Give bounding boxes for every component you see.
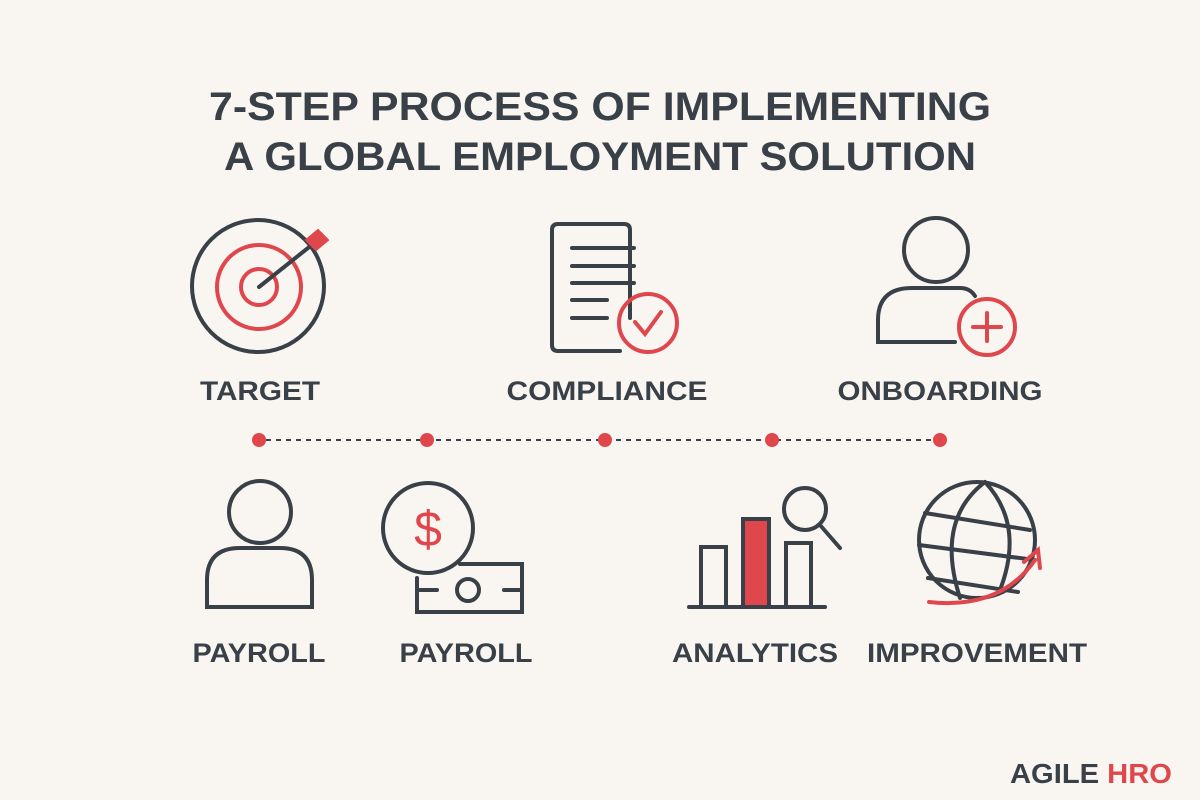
icon: onboarding [878, 218, 1015, 355]
icon: analytics [689, 488, 840, 607]
icon: payroll person [207, 481, 312, 607]
label: target: TARGET [200, 376, 321, 406]
icon: payroll money: $ [414, 501, 442, 557]
icon: target [192, 220, 328, 352]
icon: payroll money [383, 483, 522, 612]
timeline [252, 433, 947, 447]
label: improvement: IMPROVEMENT [867, 638, 1088, 668]
label: onboarding: ONBOARDING [838, 376, 1042, 406]
icon: improvement globe [919, 482, 1040, 603]
title: 7-STEP PROCESS OF IMPLEMENTING [209, 85, 991, 129]
icon: compliance document [552, 224, 677, 352]
logo: AGILE HRO [1010, 758, 1172, 789]
label: compliance: COMPLIANCE [506, 376, 708, 406]
title: A GLOBAL EMPLOYMENT SOLUTION [224, 135, 976, 179]
title [209, 85, 991, 179]
label: payroll 1: PAYROLL [192, 638, 326, 668]
label: payroll 2: PAYROLL [400, 638, 532, 668]
label: analytics: ANALYTICS [672, 638, 838, 668]
